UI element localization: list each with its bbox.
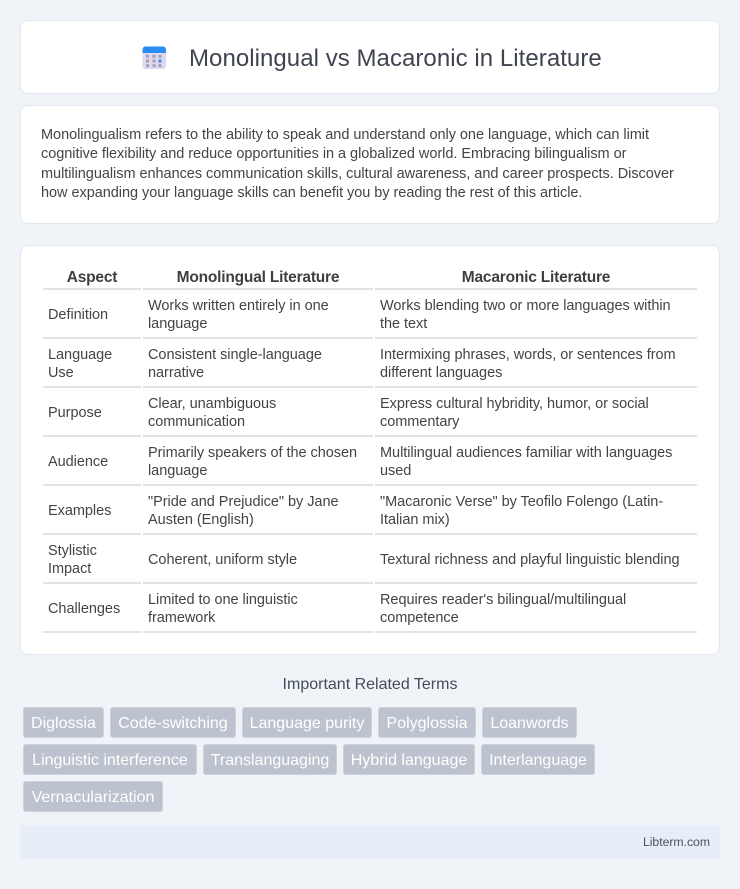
row: Language Use [48, 347, 676, 381]
row: Examples: Examples [48, 503, 111, 519]
row: Purpose: Clear, unambiguous [148, 396, 276, 412]
column header: Macaronic Literature: Macaronic Literature [462, 269, 610, 286]
row: Stylistic Impact: Coherent, uniform style [148, 552, 297, 568]
row: Language Use: Consistent single-language [148, 347, 322, 363]
row: Challenges: Limited to one linguistic [148, 592, 298, 608]
row: Audience: Multilingual audiences familiar with languages [380, 445, 672, 461]
row: Audience: Audience [48, 454, 108, 470]
row: Challenges [48, 592, 626, 626]
row: Language Use: Intermixing phrases, words, or sentences from [380, 347, 676, 363]
row: Stylistic Impact [48, 543, 680, 577]
row: Definition: Definition [48, 307, 108, 323]
intro text: Monolingualism refers to the ability to speak and understand only one language, which can limit [41, 127, 649, 143]
related term tags [23, 707, 595, 812]
tag [23, 781, 163, 812]
row: Challenges: Challenges [48, 601, 120, 617]
row: Definition: Works blending two or more languages within [380, 298, 671, 314]
tag: Hybrid language [351, 752, 467, 769]
tag: Language purity [250, 715, 364, 732]
row: Audience: language [148, 463, 207, 479]
row: Purpose: commentary [380, 414, 459, 430]
tag: Interlanguage [489, 752, 587, 769]
tag [242, 707, 372, 738]
row: Examples: "Pride and Prejudice" by Jane [148, 494, 338, 510]
row: Definition [48, 298, 671, 332]
column header: Monolingual Literature: Monolingual Literature [177, 269, 339, 286]
row: Purpose: Purpose [48, 405, 102, 421]
title: Monolingual vs Macaronic in Literature [189, 45, 602, 72]
tag [203, 744, 337, 775]
tag: Code-switching [118, 715, 228, 732]
row: Definition: Works written entirely in one [148, 298, 329, 314]
footer bar [20, 825, 720, 859]
row: Language Use: narrative [148, 365, 204, 381]
column header: Aspect: Aspect [67, 269, 117, 286]
related terms heading: Important Related Terms [283, 676, 457, 693]
row: Examples: Italian mix) [380, 512, 450, 528]
tag: Translanguaging [211, 752, 329, 769]
tag [23, 707, 104, 738]
tag [378, 707, 476, 738]
comparison table panel [20, 245, 720, 655]
tag [110, 707, 236, 738]
tag: Diglossia [31, 715, 96, 732]
tag: Linguistic interference [32, 752, 188, 769]
row: Examples [48, 494, 663, 528]
row: Audience [48, 445, 672, 479]
tag: Loanwords [490, 715, 569, 732]
row: Challenges: competence [380, 610, 459, 626]
intro text: cognitive flexibility and reduce opportunities in a globalized world. Embracing bilingualism or [41, 146, 626, 162]
row: Audience: Primarily speakers of the chosen [148, 445, 357, 461]
row: Challenges: Requires reader's bilingual/multilingual [380, 592, 626, 608]
row: Examples: Austen (English) [148, 512, 254, 528]
row: Purpose: Express cultural hybridity, humor, or social [380, 396, 649, 412]
tag [23, 744, 197, 775]
icon: calendar grid [142, 46, 166, 69]
row: Stylistic Impact: Textural richness and playful linguistic blending [380, 552, 680, 568]
intro text: how expanding your language skills can benefit you by reading the rest of this article. [41, 185, 582, 201]
row: Language Use: different languages [380, 365, 502, 381]
intro text [41, 127, 674, 201]
row: Stylistic Impact: Stylistic [48, 543, 97, 559]
intro text: multilingualism enhances communication skills, cultural awareness, and career prospects. Discover [41, 166, 674, 182]
tag [481, 744, 595, 775]
row: Language Use: Language [48, 347, 112, 363]
row: Stylistic Impact: Impact [48, 561, 91, 577]
row: Purpose [48, 396, 649, 430]
tag: Polyglossia [387, 715, 467, 732]
tag [482, 707, 577, 738]
tag: Vernacularization [32, 789, 154, 806]
row: Audience: used [380, 463, 411, 479]
row: Language Use: Use [48, 365, 74, 381]
tag [343, 744, 475, 775]
row: Examples: "Macaronic Verse" by Teofilo Folengo (Latin- [380, 494, 663, 510]
footer credit: Libterm.com [643, 835, 710, 849]
header panel [20, 20, 720, 94]
row: Definition: language [148, 316, 207, 332]
row: Definition: the text [380, 316, 427, 332]
row: Purpose: communication [148, 414, 245, 430]
row: Challenges: framework [148, 610, 215, 626]
intro panel [20, 105, 720, 224]
